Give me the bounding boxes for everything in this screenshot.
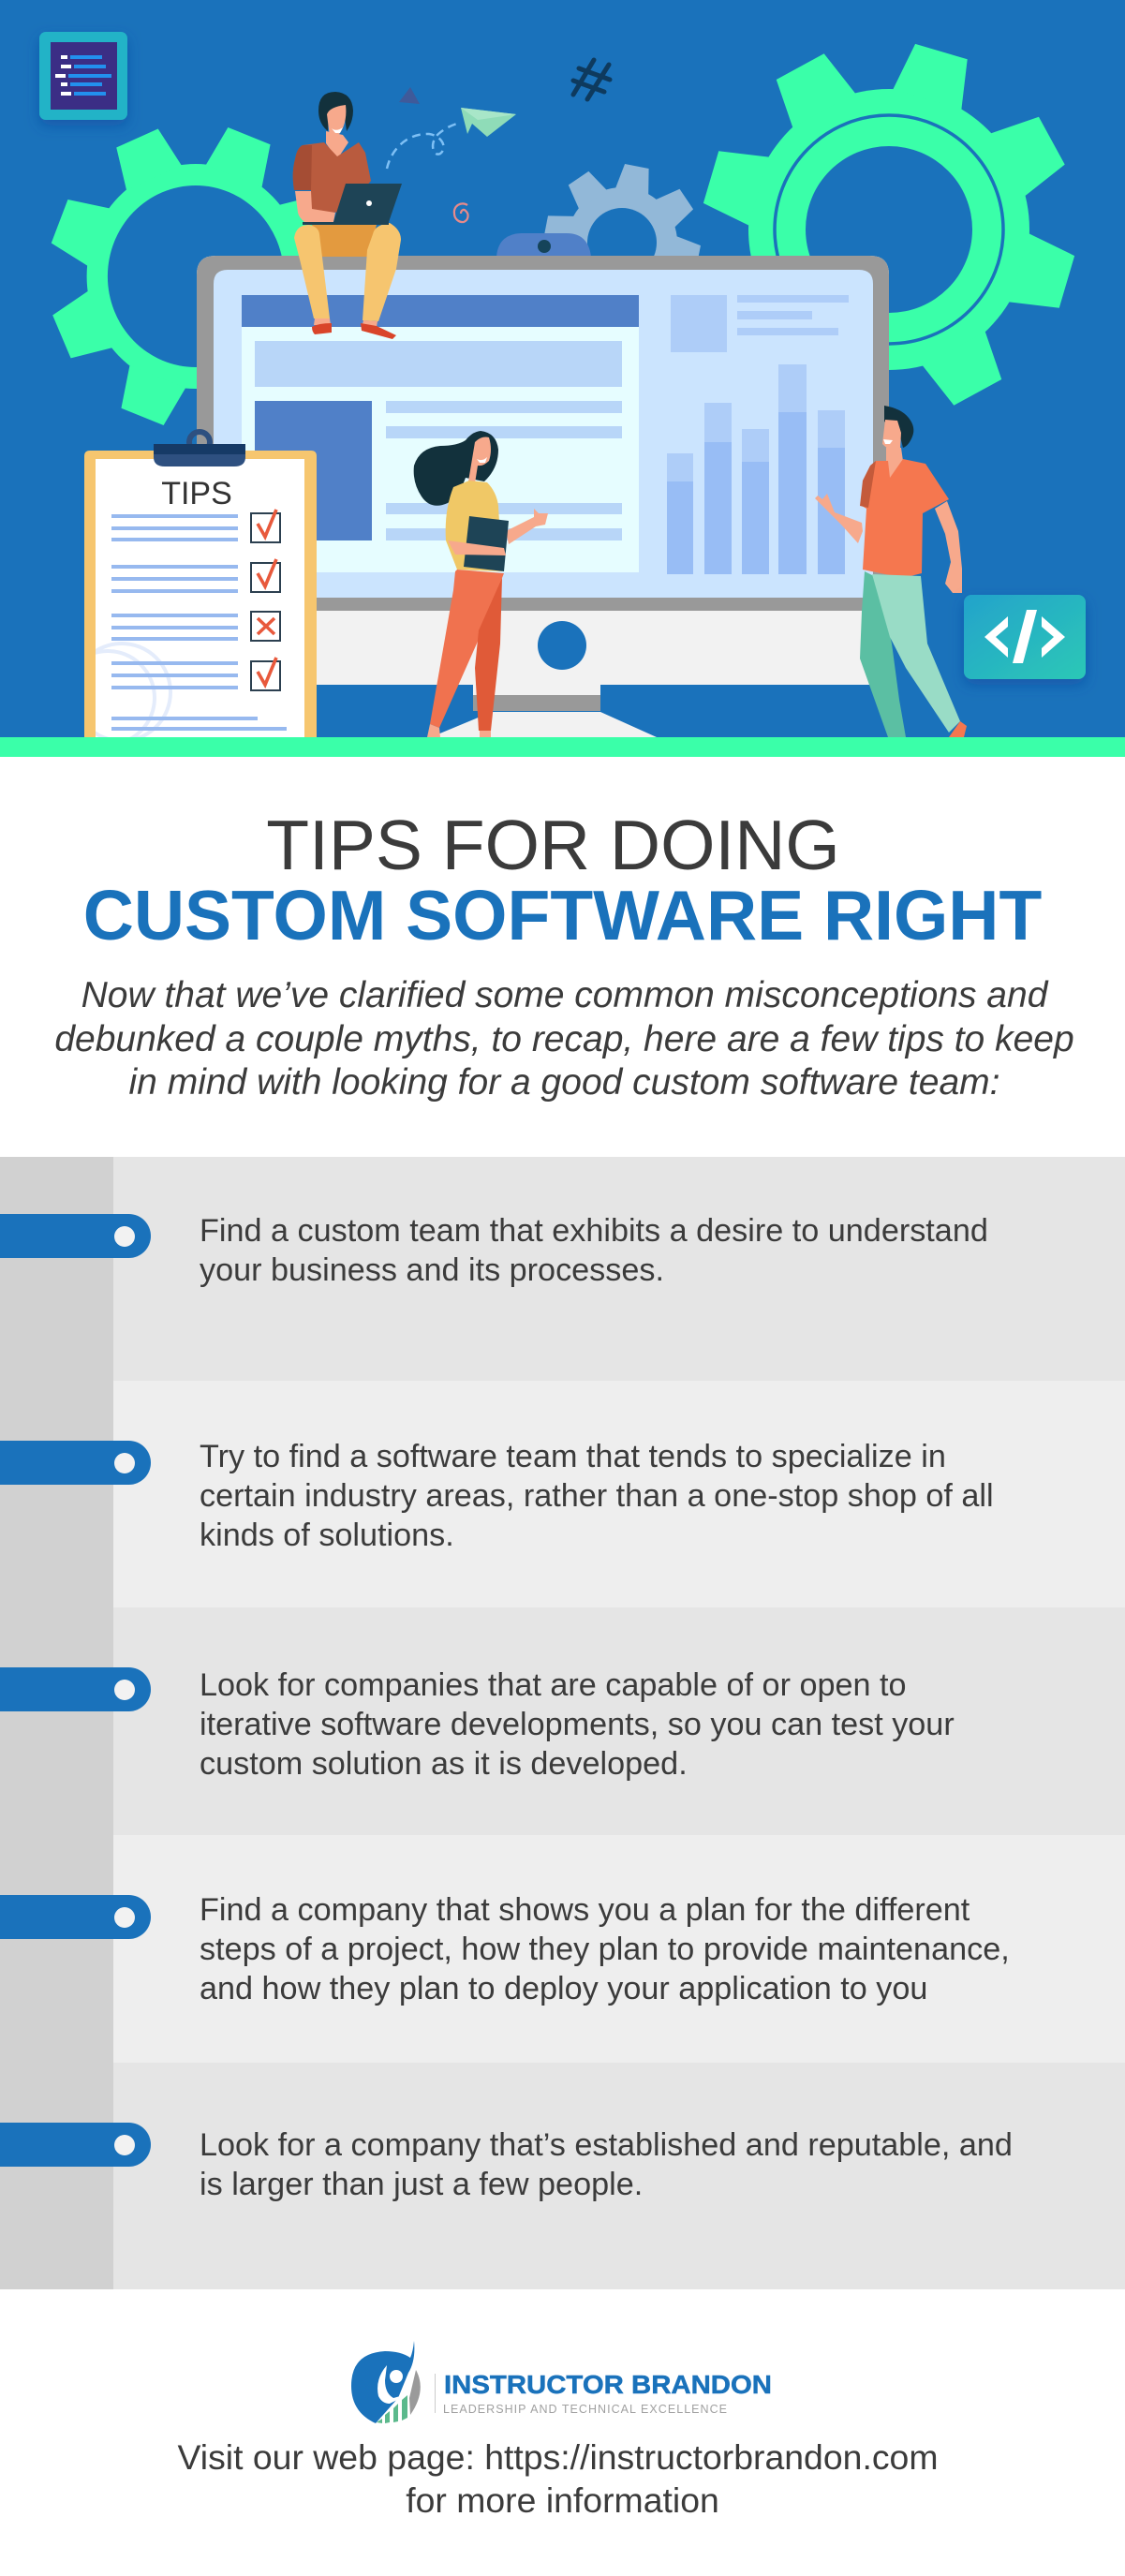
icon: code list xyxy=(39,32,127,120)
tip 4 text: and how they plan to deploy your application to you xyxy=(200,1971,927,2006)
icon: right gear xyxy=(701,41,1077,418)
logo wordmark: INSTRUCTOR BRANDON xyxy=(444,2370,772,2399)
tab marker 5 xyxy=(0,2123,151,2167)
check boxes xyxy=(251,510,280,690)
clipboard clip xyxy=(154,432,245,466)
tab marker 4 xyxy=(0,1895,151,1939)
tip 1 text xyxy=(200,1213,988,1288)
icon: paper plane with dashed trail xyxy=(387,108,516,169)
icon: webcam xyxy=(496,233,591,257)
logo mark xyxy=(351,2341,421,2423)
screen: summary block xyxy=(671,295,849,352)
tip 2 text xyxy=(200,1439,994,1553)
footer text: for more information xyxy=(406,2480,719,2520)
clipboard xyxy=(84,429,317,737)
logo xyxy=(351,2341,772,2423)
tip 3 text: iterative software developments, so you can test your xyxy=(200,1707,955,1742)
decorative stamp rings xyxy=(96,642,172,737)
title line 2: CUSTOM SOFTWARE RIGHT xyxy=(83,876,1042,955)
panel: hero illustration xyxy=(0,0,1125,757)
panel: tip 4 xyxy=(0,1835,1125,2063)
person: man standing and pointing xyxy=(815,406,967,737)
monitor stand button xyxy=(538,621,586,670)
panel: tip 3 xyxy=(0,1607,1125,1835)
intro text xyxy=(54,975,1074,1103)
icon: hash symbol xyxy=(573,60,610,99)
tip 5 text xyxy=(200,2127,1013,2202)
tip 3 text xyxy=(200,1667,955,1782)
tip 1 text: your business and its processes. xyxy=(200,1252,664,1288)
tab marker 1 xyxy=(0,1214,151,1258)
screen: document panel xyxy=(242,295,639,572)
tab marker 3 xyxy=(0,1667,151,1711)
intro text: debunked a couple myths, to recap, here are a few tips to keep xyxy=(54,1019,1074,1059)
panel: tip 2 xyxy=(0,1381,1125,1607)
tip 4 text: steps of a project, how they plan to provide maintenance, xyxy=(200,1932,1010,1967)
intro text: Now that we’ve clarified some common misconceptions and xyxy=(81,975,1047,1015)
logo tagline: LEADERSHIP AND TECHNICAL EXCELLENCE xyxy=(443,2403,727,2416)
intro text: in mind with looking for a good custom software team: xyxy=(129,1062,999,1103)
tab marker 2 xyxy=(0,1441,151,1485)
tip 3 text: Look for companies that are capable of or open to xyxy=(200,1667,907,1703)
panel: tip 1 xyxy=(0,1157,1125,1381)
footer text: Visit our web page: https://instructorbrandon.com xyxy=(178,2437,938,2477)
tip 5 text: is larger than just a few people. xyxy=(200,2167,643,2202)
tip 4 text: Find a company that shows you a plan for the different xyxy=(200,1892,970,1928)
tip 3 text: custom solution as it is developed. xyxy=(200,1746,688,1782)
icon: code badge xyxy=(964,595,1086,679)
icon: left gear xyxy=(49,125,343,428)
tip 5 text: Look for a company that’s established and reputable, and xyxy=(200,2127,1013,2163)
icon: spiral xyxy=(454,203,468,222)
person: woman with clipboard xyxy=(414,431,548,737)
title xyxy=(83,806,1042,955)
logo divider xyxy=(435,2374,436,2413)
person: man sitting with laptop xyxy=(293,92,402,339)
screen: bar chart xyxy=(667,364,845,574)
tip 4 text xyxy=(200,1892,1010,2006)
panel: tip 5 xyxy=(0,2063,1125,2289)
clipboard heading: TIPS xyxy=(161,476,232,511)
icon: triangle xyxy=(399,87,420,104)
footer text xyxy=(178,2437,938,2520)
tip 2 text: certain industry areas, rather than a one-stop shop of all xyxy=(200,1478,994,1514)
checklist lines xyxy=(111,514,287,731)
title line 1: TIPS FOR DOING xyxy=(266,806,840,884)
tip 2 text: kinds of solutions. xyxy=(200,1517,454,1553)
tip 1 text: Find a custom team that exhibits a desire to understand xyxy=(200,1213,988,1249)
icon: small gear xyxy=(542,163,702,322)
monitor xyxy=(197,256,889,737)
tip 2 text: Try to find a software team that tends to specialize in xyxy=(200,1439,946,1474)
